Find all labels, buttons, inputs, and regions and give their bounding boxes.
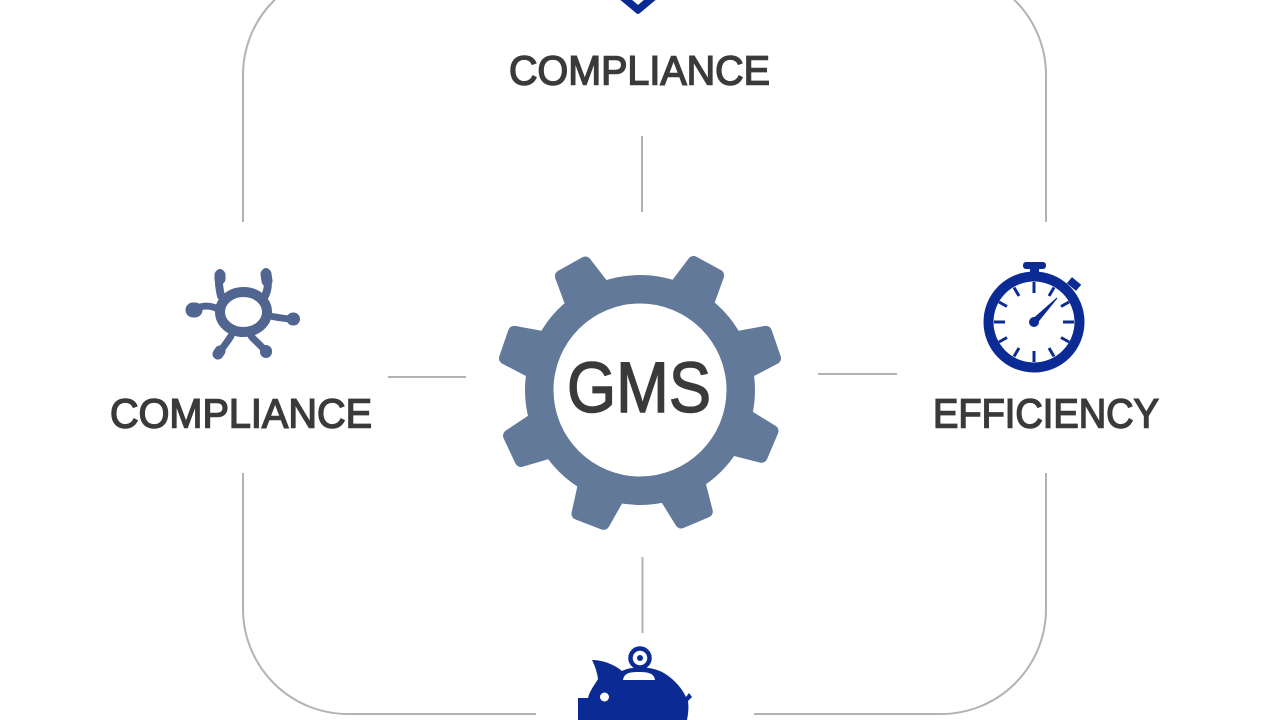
icon: gear with GMS xyxy=(503,260,777,526)
icon: shield (cropped at top) xyxy=(618,0,658,14)
heading: left compliance: COMPLIANCE xyxy=(110,390,372,436)
heading: efficiency: EFFICIENCY xyxy=(933,390,1159,436)
icon: network hub xyxy=(193,272,294,355)
icon: piggy bank (cropped at bottom) xyxy=(578,648,692,720)
icon: stopwatch xyxy=(988,262,1081,368)
gear label: GMS xyxy=(567,349,711,428)
heading: top compliance: COMPLIANCE xyxy=(509,48,770,94)
